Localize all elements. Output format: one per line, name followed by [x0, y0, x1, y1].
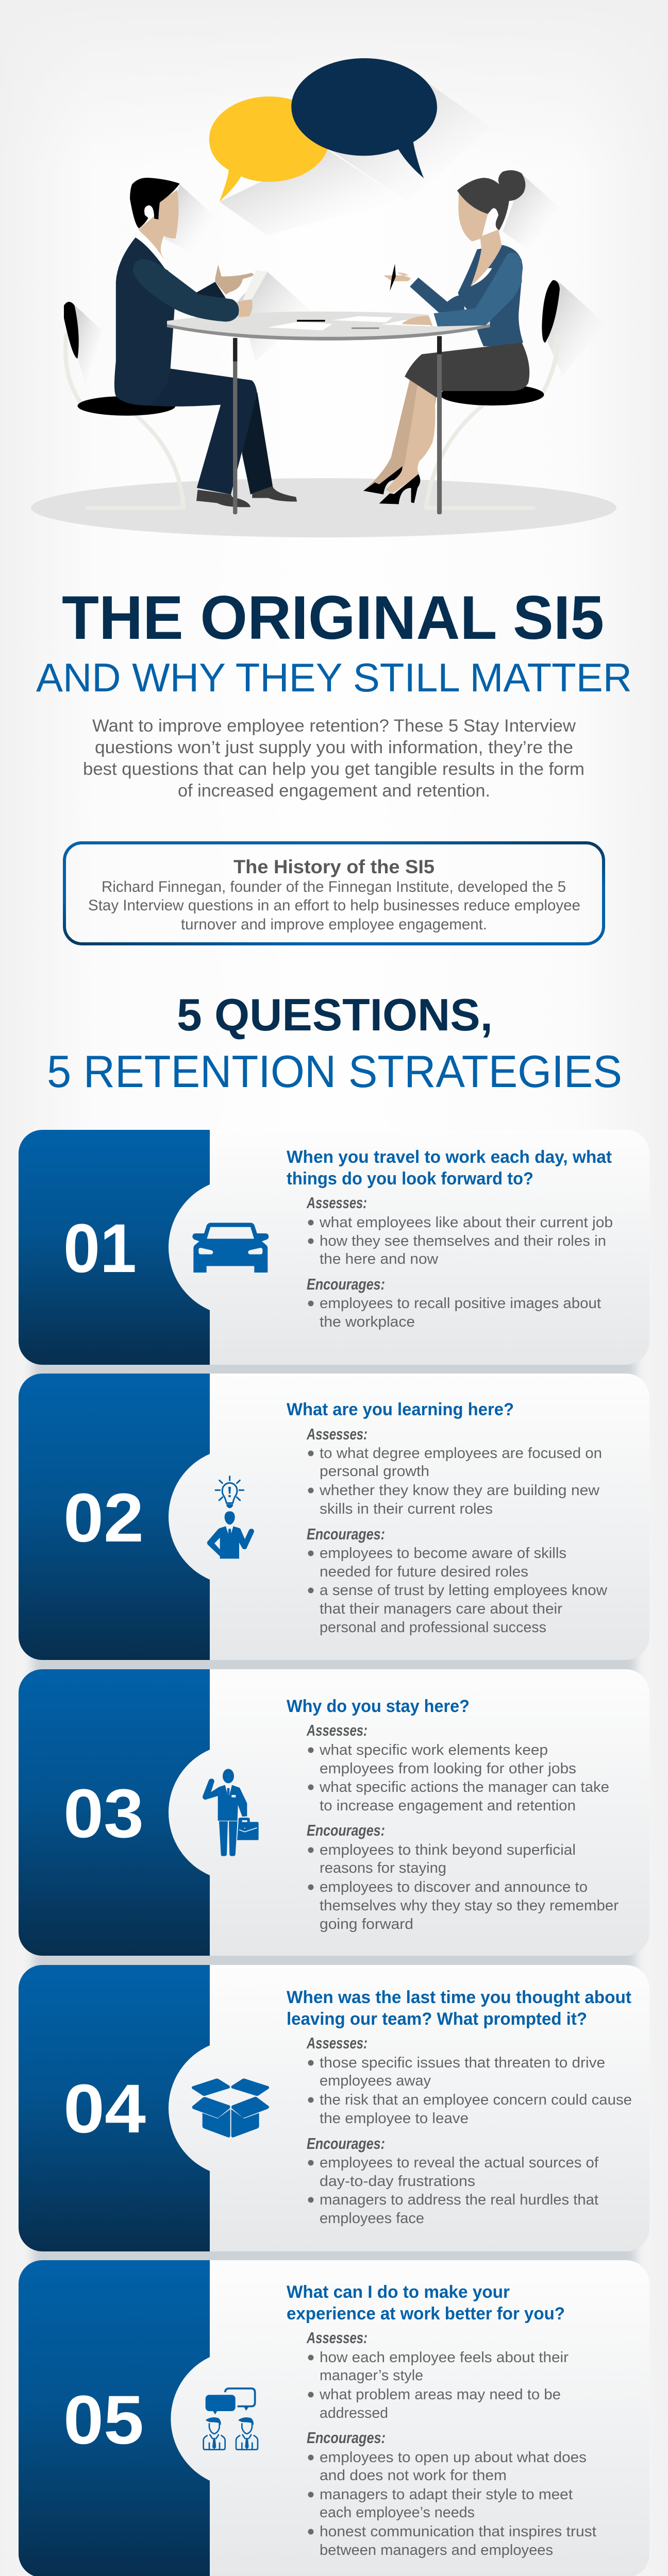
floor ellipse: [31, 478, 616, 537]
question 3 text: Why do you stay here?: [287, 1697, 470, 1716]
question 1 text: how they see themselves and their roles in: [320, 1233, 606, 1249]
question 2 text: skills in their current roles: [320, 1501, 493, 1517]
question 4 text: the employee to leave: [320, 2110, 469, 2127]
card 1: [19, 1130, 649, 1365]
question 3 text: what specific work elements keep: [319, 1742, 548, 1758]
number panel 04: 04: [63, 2071, 146, 2147]
question 3 text: themselves why they stay so they remember: [320, 1897, 619, 1914]
question 5 text: honest communication that inspires trust: [320, 2523, 596, 2540]
callout: the history of the SI5: turnover and improve employee engagement.: [181, 916, 487, 933]
question 3 text: employees to discover and announce to: [320, 1879, 588, 1895]
question 5 text: employees to open up about what does: [320, 2449, 587, 2466]
question 2 text: to what degree employees are focused on: [320, 1445, 602, 1462]
icon: open box: [192, 2078, 269, 2138]
icon: person with light bulb: [207, 1477, 254, 1558]
question 5 text: managers to adapt their style to meet: [320, 2486, 573, 2503]
question 2 text: [287, 1400, 608, 1636]
number panel 02: 02: [63, 1480, 144, 1556]
question 4 text: managers to address the real hurdles that: [320, 2192, 598, 2208]
question 2 text: employees to become aware of skills: [320, 1545, 566, 1562]
question 4 text: day-to-day frustrations: [320, 2173, 475, 2190]
question 1 text: employees to recall positive images about: [320, 1295, 601, 1312]
question 4 text: employees away: [320, 2073, 431, 2089]
question 3 text: to increase engagement and retention: [320, 1798, 576, 1814]
woman: legs and heels: [363, 380, 437, 504]
question 5 text: each employee’s needs: [320, 2504, 475, 2521]
question 2 text: that their managers care about their: [320, 1601, 562, 1617]
callout: the history of the SI5: The History of the SI5: [233, 856, 435, 877]
question 5 text: what problem areas may need to be: [319, 2386, 561, 2403]
card shadows: [32, 1350, 636, 2276]
right chair: [426, 280, 560, 508]
question 1 text: Encourages:: [307, 1275, 385, 1293]
illustration: two people talking at a table: [31, 58, 616, 537]
question 3 text: reasons for staying: [320, 1860, 446, 1876]
number panel 03: [19, 1669, 210, 1956]
title: [36, 583, 632, 700]
woman: torso, skirt and head: [383, 170, 529, 398]
number panel 02: [19, 1374, 210, 1660]
section heading: 5 RETENTION STRATEGIES: [47, 1046, 622, 1097]
card 2: [19, 1374, 649, 1660]
question 5 text: [287, 2282, 596, 2558]
question 3 text: Assesses:: [306, 1721, 368, 1739]
man: arms and hands: [133, 260, 268, 321]
speech bubble: navy: [291, 58, 437, 178]
question 2 text: a sense of trust by letting employees know: [320, 1582, 608, 1599]
question 3 text: employees from looking for other jobs: [320, 1760, 576, 1777]
question 5 text: how each employee feels about their: [320, 2349, 569, 2366]
intro paragraph: best questions that can help you get tangible results in the form: [83, 759, 584, 779]
speech bubble: yellow: [209, 96, 329, 201]
question 3 text: going forward: [320, 1916, 413, 1933]
intro paragraph: of increased engagement and retention.: [178, 781, 490, 801]
question 1 text: When you travel to work each day, what: [287, 1147, 612, 1167]
title: AND WHY THEY STILL MATTER: [36, 655, 632, 700]
question 5 text: between managers and employees: [320, 2542, 553, 2558]
question 1 text: [287, 1147, 613, 1330]
question 4 text: employees face: [320, 2210, 424, 2227]
question 2 text: Encourages:: [307, 1525, 385, 1543]
question 3 text: employees to think beyond superficial: [320, 1842, 576, 1858]
question 2 text: personal and professional success: [320, 1619, 546, 1636]
intro paragraph: Want to improve employee retention? These 5 Stay Interview: [92, 716, 576, 736]
question 4 text: Encourages:: [307, 2134, 385, 2153]
intro paragraph: questions won’t just supply you with information, they’re the: [95, 738, 573, 757]
question 2 text: What are you learning here?: [287, 1400, 514, 1419]
question 4 text: Assesses:: [306, 2034, 368, 2052]
question 2 text: personal growth: [320, 1463, 429, 1480]
number panel 05: 05: [63, 2382, 144, 2459]
card 5: [19, 2260, 649, 2576]
question 5 text: and does not work for them: [320, 2467, 507, 2484]
question 3 text: Encourages:: [307, 1821, 385, 1839]
table top with papers: [167, 312, 490, 341]
question 3 text: [287, 1697, 619, 1933]
question 5 text: Assesses:: [306, 2329, 368, 2347]
question 3 text: what specific actions the manager can take: [319, 1779, 609, 1795]
icon: two people talking: [204, 2388, 258, 2450]
question 2 text: Assesses:: [306, 1425, 368, 1443]
card 3: [19, 1669, 649, 1956]
question 4 text: those specific issues that threaten to drive: [320, 2055, 605, 2071]
man: trousers and shoes: [149, 369, 297, 507]
question 5 text: addressed: [320, 2405, 388, 2421]
question 4 text: When was the last time you thought about: [287, 1988, 631, 2007]
icon: person with briefcase: [203, 1769, 259, 1856]
table legs: [233, 336, 442, 514]
question 1 text: things do you look forward to?: [287, 1169, 533, 1189]
question 1 text: the workplace: [320, 1314, 415, 1330]
callout: the history of the SI5: Richard Finnegan, founder of the Finnegan Institute, developed the 5: [102, 878, 566, 895]
question 5 text: What can I do to make your: [287, 2282, 510, 2302]
long shadows: [75, 84, 605, 383]
number panel 05: [19, 2260, 210, 2576]
intro paragraph: [83, 716, 584, 801]
title: THE ORIGINAL SI5: [62, 583, 604, 652]
section heading: [47, 989, 622, 1097]
number panel 01: 01: [63, 1210, 137, 1287]
man: torso and head: [114, 178, 196, 405]
question 4 text: leaving our team? What prompted it?: [287, 2009, 587, 2029]
callout: the history of the SI5: [64, 843, 604, 944]
card 4: [19, 1965, 649, 2251]
question 1 text: Assesses:: [306, 1194, 367, 1212]
section heading: 5 QUESTIONS,: [177, 989, 493, 1040]
callout: the history of the SI5: Stay Interview questions in an effort to help businesses reduce employee: [88, 897, 580, 914]
question 4 text: [287, 1988, 632, 2227]
number panel 04: [19, 1965, 210, 2251]
question 4 text: the risk that an employee concern could cause: [320, 2092, 632, 2108]
icon: car: [192, 1223, 269, 1273]
woman: front arm and hand: [403, 252, 522, 326]
question 1 text: the here and now: [320, 1251, 439, 1267]
question 5 text: Encourages:: [307, 2429, 386, 2447]
question 5 text: experience at work better for you?: [287, 2304, 565, 2324]
number panel 01: [19, 1130, 210, 1365]
number panel 03: 03: [63, 1775, 144, 1852]
left chair: [64, 302, 183, 508]
question 4 text: employees to reveal the actual sources of: [320, 2155, 599, 2171]
question 2 text: needed for future desired roles: [320, 1564, 528, 1580]
question 1 text: what employees like about their current job: [319, 1214, 613, 1231]
question 2 text: whether they know they are building new: [319, 1482, 600, 1499]
question 5 text: manager’s style: [320, 2367, 423, 2384]
